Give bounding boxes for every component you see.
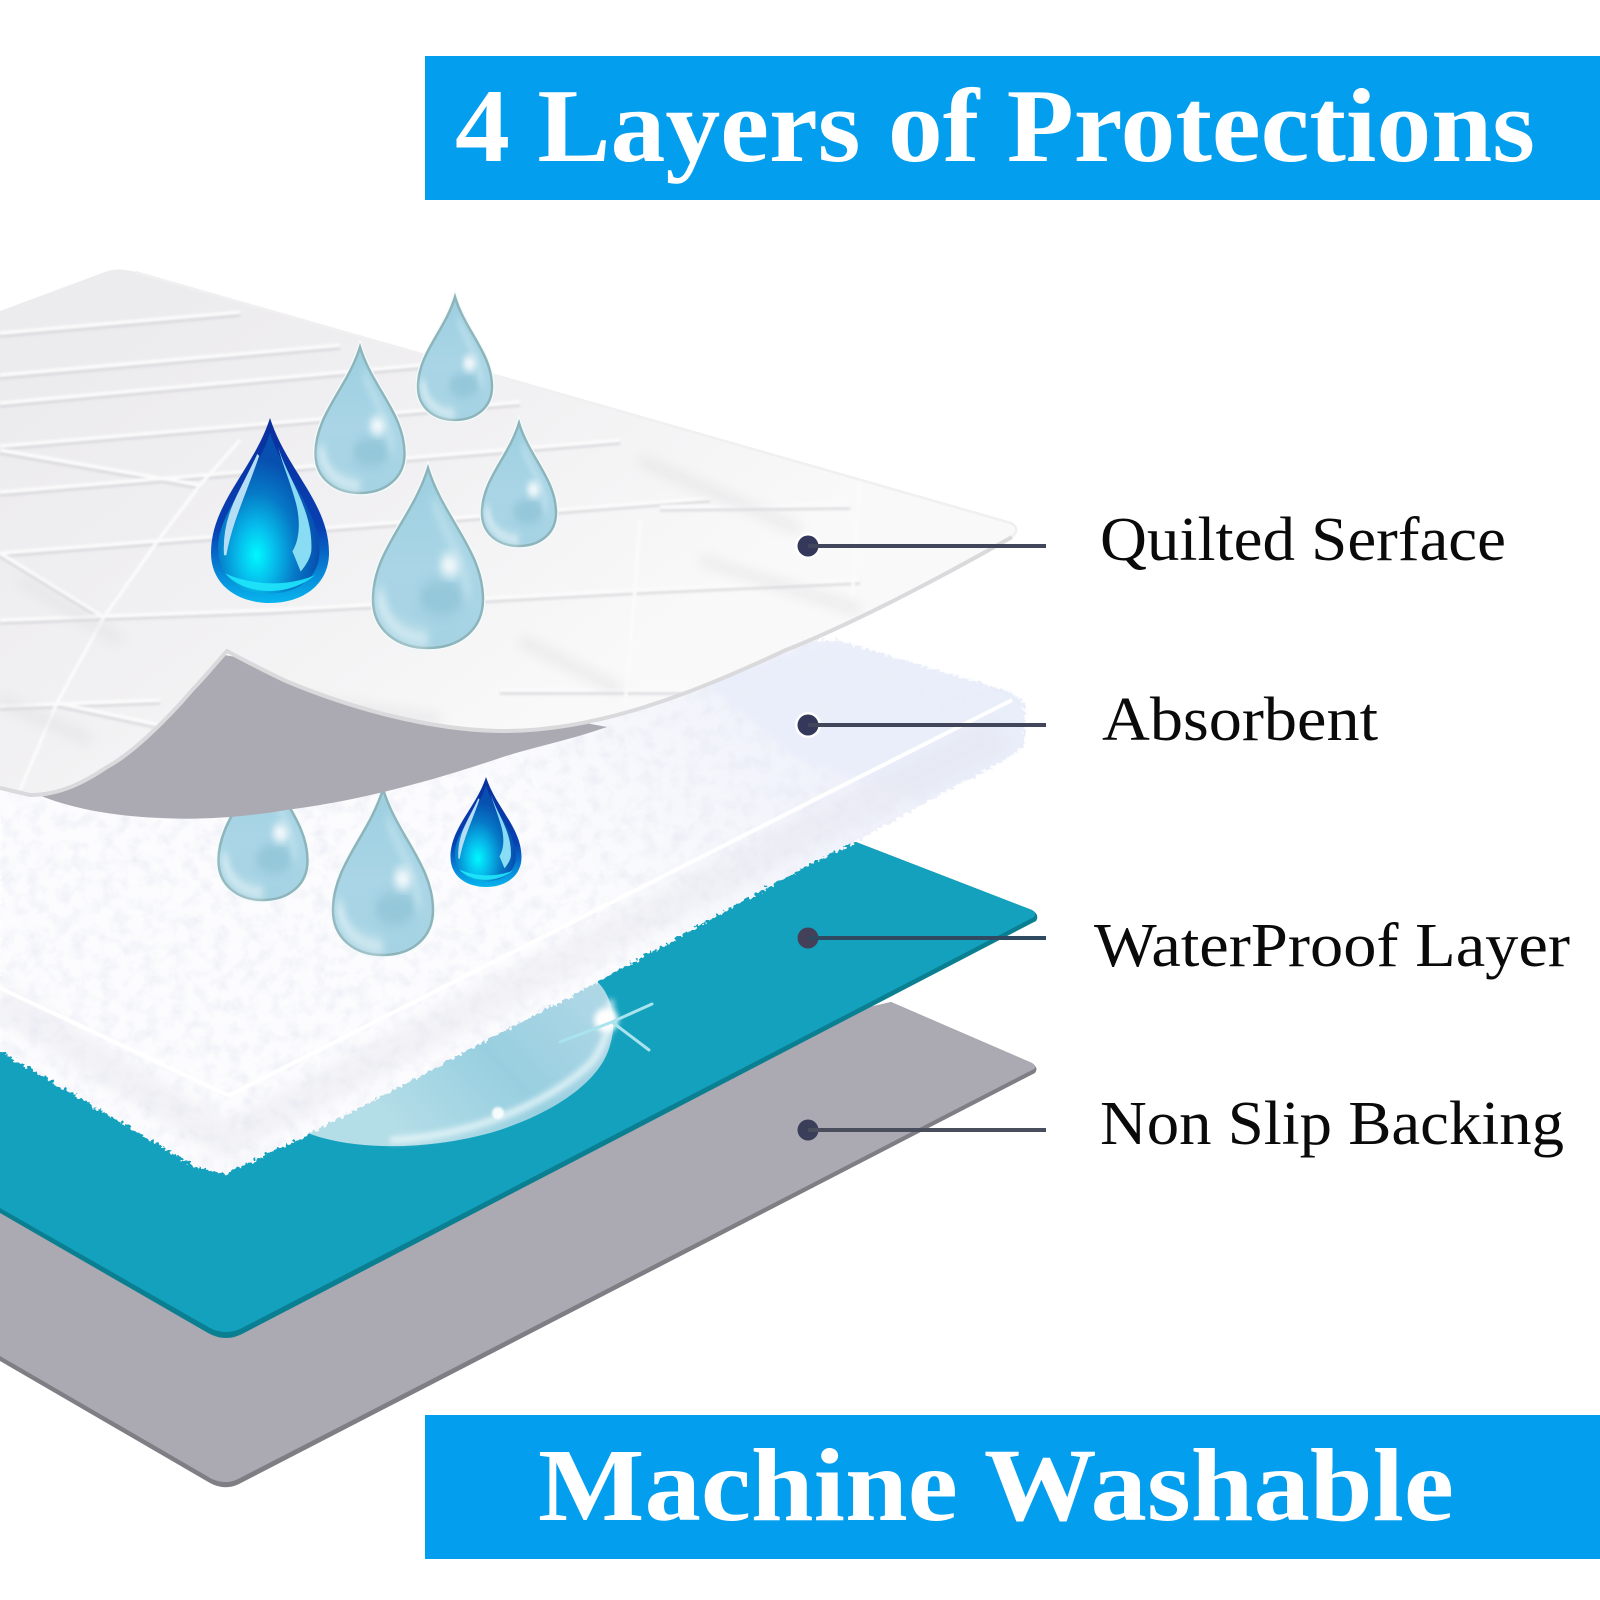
callout: absorbent (795, 686, 1378, 754)
callout: absorbent: Absorbent (1102, 686, 1378, 754)
callout: waterproof layer (798, 912, 1570, 980)
quilting stitch shadows (0, 315, 860, 728)
water drop large blue (211, 418, 329, 603)
callout: quilted surface: Quilted Serface (1100, 506, 1506, 574)
pale water drop (333, 789, 433, 955)
callout: non slip backing (798, 1090, 1564, 1158)
water drop top pale 4 (373, 468, 483, 648)
water drop top pale 1 (418, 297, 492, 420)
bottom banner text: Machine Washable (538, 1428, 1454, 1543)
layer: absorbent (0, 640, 1024, 1174)
drop behind quilted layer (218, 754, 308, 900)
quilt wrinkles (0, 460, 860, 740)
quilt underside (36, 655, 607, 819)
blue water drop (450, 777, 522, 887)
water drop top pale 2 (316, 347, 404, 493)
layer: non slip backing (0, 1002, 1036, 1487)
bottom banner (425, 1415, 1600, 1559)
title banner (425, 56, 1600, 200)
water drop top pale 3 (482, 423, 556, 546)
quilt top face (0, 270, 1016, 795)
title text: 4 Layers of Protections (455, 67, 1535, 184)
layer: waterproof (0, 842, 1037, 1338)
callout: non slip backing: Non Slip Backing (1100, 1090, 1564, 1158)
water bead on waterproof layer (300, 976, 652, 1146)
callout: quilted surface (795, 506, 1506, 574)
quilting stitches (0, 312, 860, 790)
sparkle (560, 1004, 652, 1050)
callout: waterproof layer: WaterProof Layer (1094, 912, 1570, 980)
quilt bound edge (0, 537, 1012, 795)
layer: quilted surface (0, 270, 1016, 819)
